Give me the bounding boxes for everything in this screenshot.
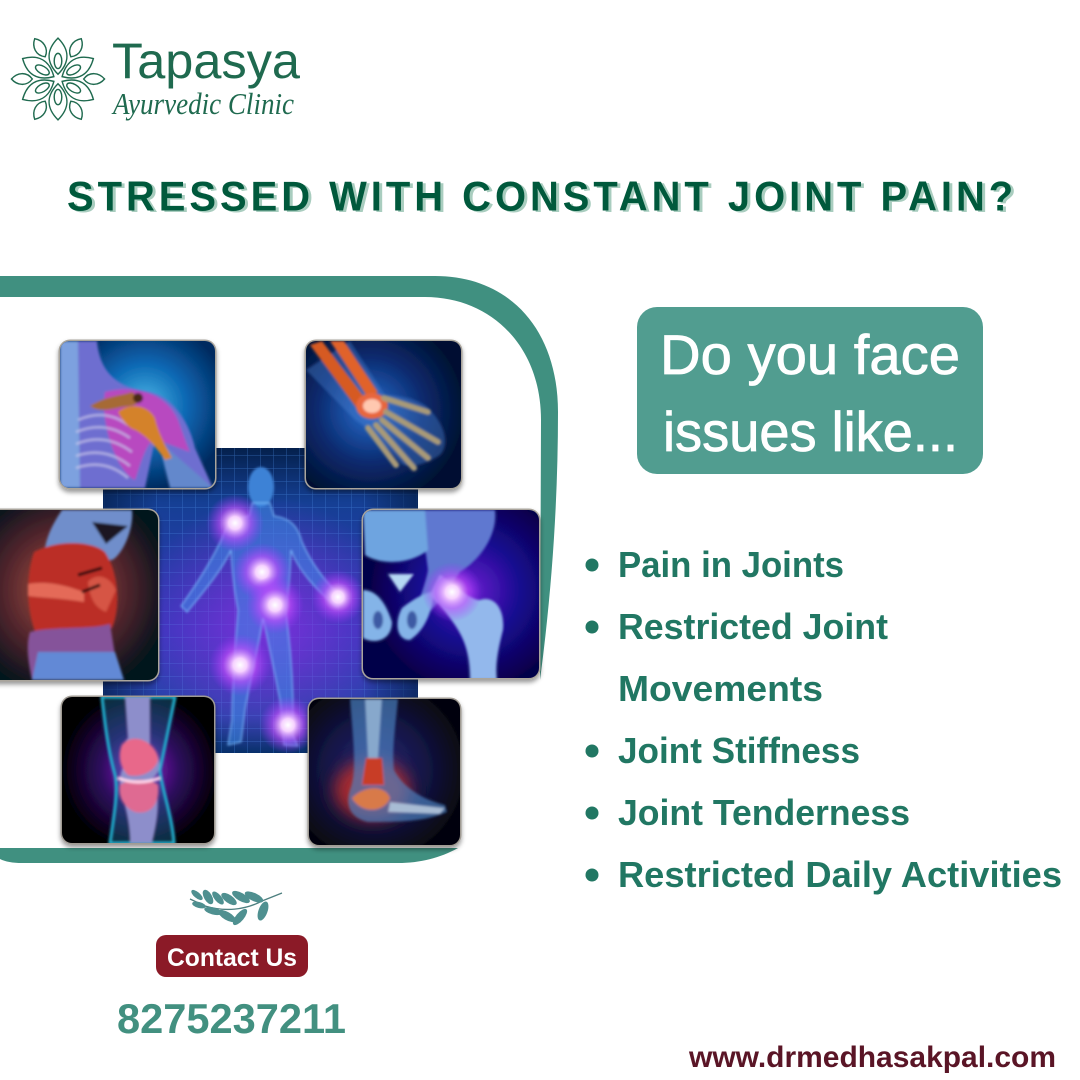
callout: do you face issues like: issues like... [663, 400, 958, 463]
image: spine [0, 510, 158, 680]
bullet: restricted daily activities: Restricted Daily Activities [618, 854, 1062, 895]
logo tagline: Ayurvedic Clinic [111, 86, 294, 121]
list: joint symptoms [586, 544, 1062, 895]
teal frame bottom [0, 848, 458, 863]
image: hip [363, 510, 539, 680]
bullet: restricted joint movements: Restricted Joint [618, 606, 888, 647]
image: foot [309, 699, 460, 845]
phone number: 8275237211 [117, 995, 346, 1042]
bullet: joint tenderness: Joint Tenderness [618, 792, 910, 833]
glowing joints [206, 494, 365, 754]
image: shoulder [60, 341, 215, 488]
button: contact us [156, 935, 308, 977]
bullet: pain in joints: Pain in Joints [618, 544, 844, 585]
title: STRESSED WITH CONSTANT JOINT PAIN? [70, 174, 1016, 221]
image: knee [62, 697, 214, 843]
icon: lotus mandala [11, 36, 105, 122]
bullet: restricted joint movements: Movements [618, 668, 823, 709]
image: full body with glowing joints [103, 448, 418, 754]
callout: do you face issues like [637, 307, 983, 474]
button: contact us: Contact Us [167, 944, 297, 972]
bullet: joint stiffness: Joint Stiffness [618, 730, 860, 771]
panel: joint pain image collage [0, 276, 558, 863]
teal frame top and right [0, 276, 558, 680]
logo: Tapasya Ayurvedic Clinic [11, 33, 300, 122]
bullet: restricted joint movements [586, 606, 888, 709]
logo wordmark: Tapasya [112, 33, 300, 89]
image: wrist [306, 341, 461, 488]
website: www.drmedhasakpal.com [688, 1041, 1056, 1074]
title: STRESSED WITH CONSTANT JOINT PAIN? [67, 173, 1013, 220]
icon: leaf sprig [190, 888, 282, 927]
callout: do you face issues like: Do you face [660, 323, 960, 386]
